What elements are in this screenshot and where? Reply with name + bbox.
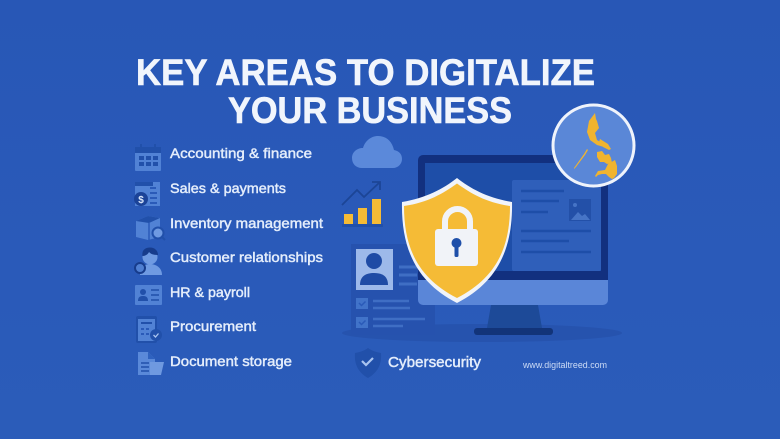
monitor chin xyxy=(418,280,608,305)
philippines map badge xyxy=(553,105,634,186)
icon: cloud xyxy=(352,136,402,168)
label: customer relationships: Customer relationships xyxy=(170,249,323,265)
label: procurement: Procurement xyxy=(170,318,256,334)
label: document storage: Document storage xyxy=(170,353,292,369)
icon: growth chart xyxy=(342,182,383,227)
icon: inventory box xyxy=(136,216,165,240)
illustration: monitor xyxy=(418,155,608,335)
title: YOUR BUSINESS xyxy=(228,89,512,131)
label: sales and payments: Sales & payments xyxy=(170,180,286,196)
title: KEY AREAS TO DIGITALIZE xyxy=(136,51,595,93)
monitor stand xyxy=(474,305,553,335)
label: inventory management: Inventory management xyxy=(170,215,323,231)
shadow under monitor xyxy=(342,324,622,342)
illustration: profile card xyxy=(351,244,435,335)
icon: security shield xyxy=(402,178,512,303)
label: accounting and finance: Accounting & finance xyxy=(170,145,312,161)
title xyxy=(136,51,595,131)
icon: sales invoice: $ xyxy=(138,195,144,206)
icon: sales invoice xyxy=(134,182,160,206)
label: cybersecurity: Cybersecurity xyxy=(388,354,481,371)
screen document panel xyxy=(512,180,601,271)
icon: calendar xyxy=(135,144,161,171)
icon: customer xyxy=(135,248,162,275)
label: HR and payroll: HR & payroll xyxy=(170,284,250,300)
checklist xyxy=(356,298,425,328)
list of key areas xyxy=(134,144,323,375)
icon: HR id card xyxy=(135,285,162,305)
map: philippines xyxy=(574,113,617,179)
website url: www.digitaltreed.com xyxy=(522,360,607,370)
icon: procurement clipboard xyxy=(136,316,162,343)
avatar xyxy=(356,249,393,290)
icon: cybersecurity shield xyxy=(355,348,381,378)
monitor screen xyxy=(425,163,601,271)
icon: document folder xyxy=(138,352,164,375)
padlock xyxy=(435,209,478,266)
